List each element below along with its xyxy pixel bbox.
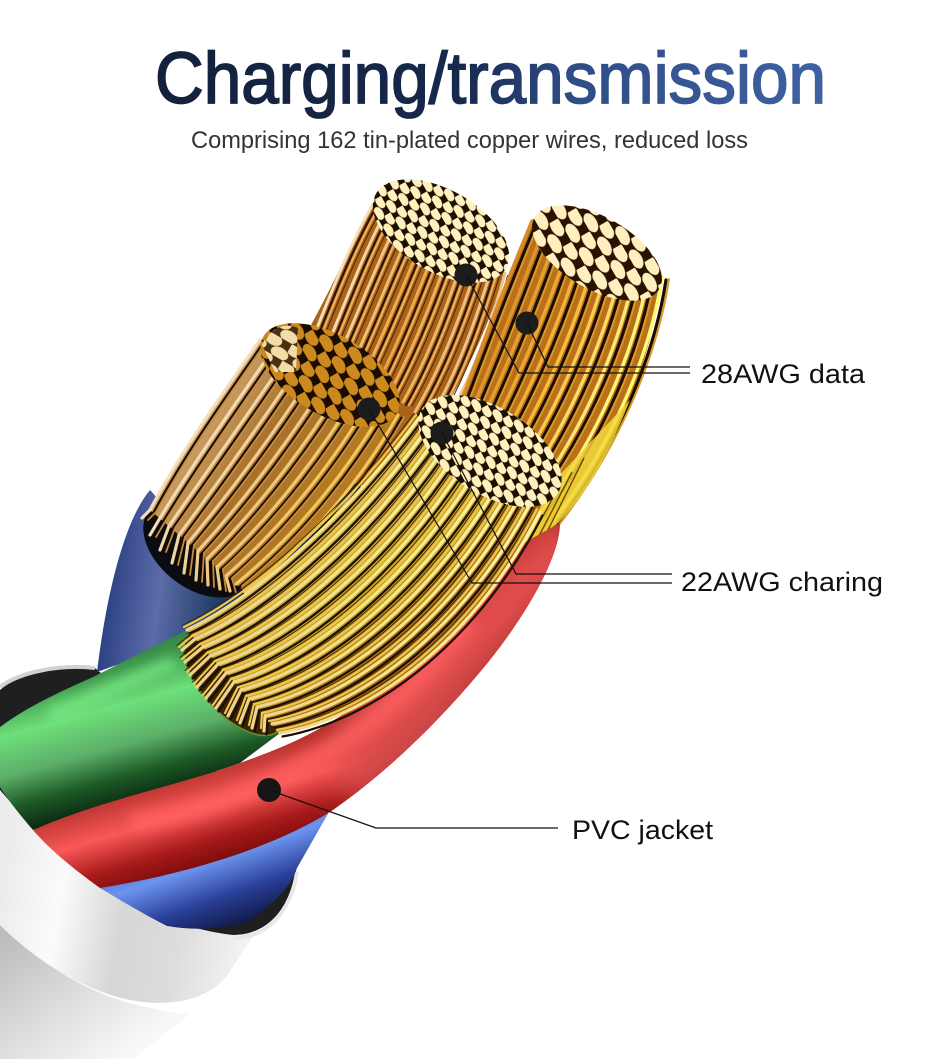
blue jacket upper section [97,480,362,672]
title: Charging/transmission [155,39,826,119]
white cable sleeve and lower cable [0,667,297,1059]
tan copper bundle, left [125,302,417,618]
callout: 28AWG data [454,264,866,389]
green jacket [0,630,280,830]
copper bundle, rear centre [300,158,526,490]
callout: PVC jacket [257,778,714,845]
wire ends, front [399,372,581,530]
wire ends, left [243,302,417,448]
callout: 22AWG charing [358,398,883,597]
red jacket [33,510,580,888]
gold bundle, front [166,372,581,752]
copper bundle, right [462,186,677,548]
callout: PVC jacket: PVC jacket [572,815,714,845]
subtitle: Comprising 162 tin-plated copper wires, reduced loss [191,127,748,154]
wire ends, right [517,186,677,320]
blue jacket lower section [100,805,333,929]
wire ends, rear centre [356,158,526,304]
callout: 22AWG charing: 22AWG charing [681,567,883,597]
callout: 28AWG data: 28AWG data [701,359,866,389]
